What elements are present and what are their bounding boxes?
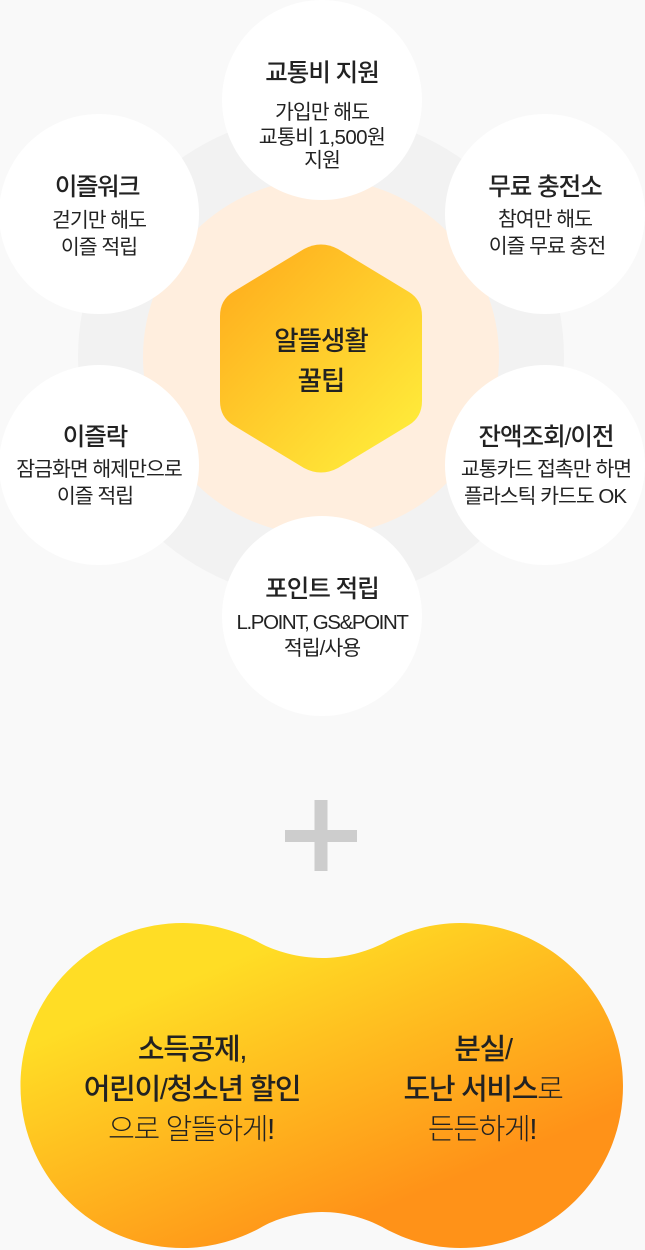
panel: bottom gradient blob: 으로 알뜰하게! — [108, 1114, 274, 1146]
outer gray ring — [78, 114, 564, 600]
circle: 잔액조회/이전: 교통카드 접촉만 하면 — [461, 458, 631, 481]
panel: bottom gradient blob: 어린이/청소년 할인 — [84, 1073, 300, 1106]
panel: bottom gradient blob: 도난 서비스로 — [403, 1073, 563, 1106]
circle: 이즐워크: 이즐 적립 — [61, 236, 137, 259]
circle: 이즐락: 이즐락 — [63, 423, 128, 451]
circle: 교통비 지원 — [222, 0, 422, 200]
center hexagon: 알뜰생활 꿀팁: 알뜰생활 — [274, 326, 368, 356]
circle: 이즐락: 이즐 적립 — [57, 485, 133, 508]
circle: 교통비 지원: 교통비 지원 — [265, 59, 379, 87]
circle: 이즐워크 — [0, 114, 199, 314]
icon: plus — [285, 800, 357, 871]
panel: bottom gradient blob: 분실/ — [454, 1034, 514, 1066]
circle: 잔액조회/이전: 플라스틱 카드도 OK — [464, 485, 627, 508]
center hexagon: 알뜰생활 꿀팁: 꿀팁 — [298, 366, 344, 396]
circle: 포인트 적립: 포인트 적립 — [265, 575, 379, 603]
circle: 무료 충전소 — [445, 114, 645, 314]
panel: bottom gradient blob: 소득공제, — [138, 1033, 246, 1066]
circle: 포인트 적립: 적립/사용 — [284, 637, 360, 660]
circle: 교통비 지원: 교통비 1,500원 — [259, 126, 385, 149]
circle: 교통비 지원: 지원 — [304, 149, 340, 172]
panel: bottom gradient blob — [20, 923, 623, 1248]
inner peach circle — [143, 179, 499, 535]
circle: 무료 충전소: 이즐 무료 충전 — [489, 235, 605, 258]
circle: 이즐락: 잠금화면 해제만으로 — [16, 458, 182, 481]
circle: 무료 충전소: 참여만 해도 — [498, 208, 592, 231]
circle: 잔액조회/이전: 잔액조회/이전 — [478, 423, 614, 451]
circle: 교통비 지원: 가입만 해도 — [275, 101, 369, 124]
circle: 이즐락 — [0, 365, 199, 565]
circle: 무료 충전소: 무료 충전소 — [488, 173, 602, 201]
center hexagon: 알뜰생활 꿀팁 — [220, 244, 422, 472]
circle: 이즐워크: 이즐워크 — [55, 173, 140, 201]
circle: 포인트 적립 — [222, 516, 422, 716]
circle: 이즐워크: 걷기만 해도 — [52, 209, 146, 232]
panel: bottom gradient blob: 든든하게! — [428, 1114, 536, 1146]
circle: 포인트 적립: L.POINT, GS&POINT — [236, 611, 409, 634]
circle: 잔액조회/이전 — [445, 365, 645, 565]
